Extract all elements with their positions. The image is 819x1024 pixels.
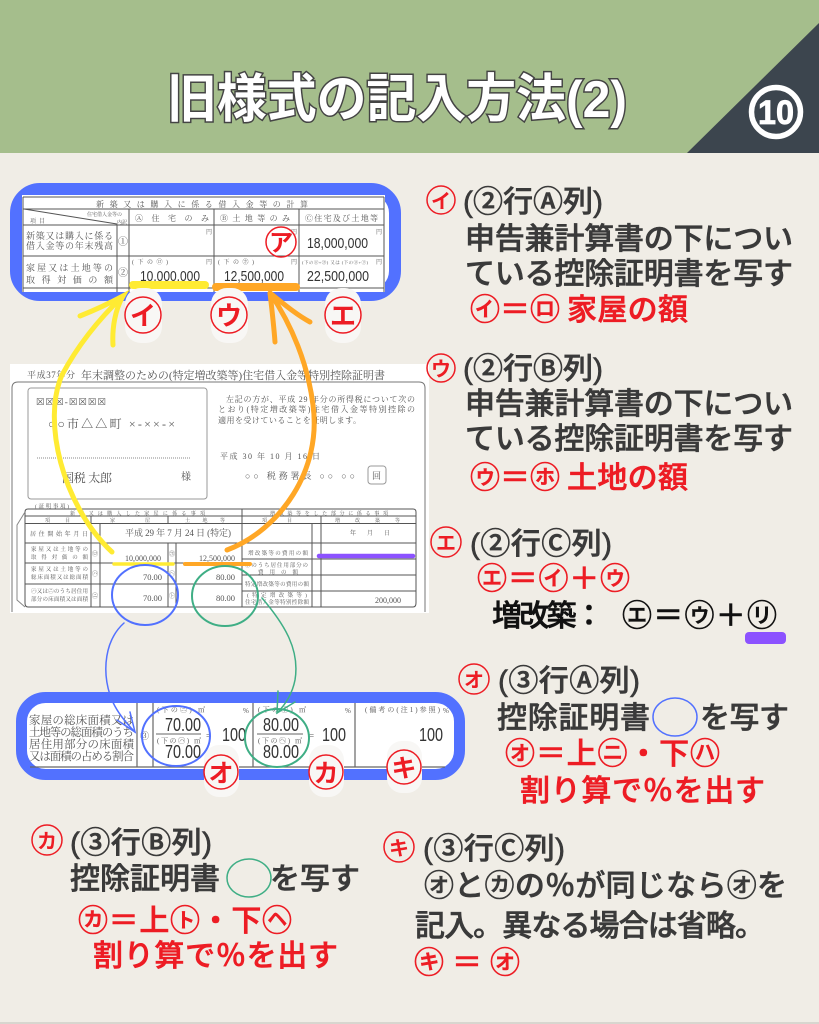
badge: ウ: [211, 288, 248, 343]
text block: オ explanation: 割り算で％を出す: [520, 775, 765, 808]
text block: キ explanation: ㋖ ＝ ㋔: [414, 947, 520, 980]
text block: キ explanation: [384, 832, 787, 980]
panel: loan calculation table: 円: [291, 229, 297, 236]
text block: イ explanation: ている控除証明書を写す: [465, 258, 793, 291]
panel: floor area ratio table: 70.00: [165, 742, 201, 762]
text block: カ explanation: [32, 825, 360, 973]
panel: floor area ratio table: 家屋の総床面積又は: [29, 713, 134, 727]
panel: floor area ratio table: 100: [222, 725, 246, 745]
panel: loan calculation table: 10,000,000: [140, 268, 200, 285]
panel: floor area ratio table: =: [309, 731, 314, 741]
panel: deduction certificate: 費用の額: [258, 568, 298, 576]
panel: loan calculation table: 円: [376, 259, 382, 266]
panel: floor area ratio table: %: [345, 707, 351, 715]
page number badge: [752, 88, 800, 136]
text block: ウ explanation: (②行Ⓑ列): [463, 353, 603, 386]
panel: deduction certificate: 平成 29 年 7 月 24 日 (特定): [125, 527, 231, 538]
panel: deduction certificate: 居住開始年月日: [30, 530, 88, 538]
text block: オ explanation: (③行Ⓐ列): [498, 665, 640, 698]
panel: deduction certificate: 年 月 日: [350, 529, 390, 537]
text block: キ explanation: ㋔と㋕の％が同じなら㋔を: [424, 870, 787, 903]
panel: loan calculation table: 22,500,000: [307, 268, 369, 285]
highlight: purple renovation cost: [319, 554, 413, 558]
panel: deduction certificate: 平成37年分: [27, 369, 75, 380]
panel: deduction certificate: 増改築等の費用の額: [248, 549, 308, 557]
panel: deduction certificate: ㋺: [92, 550, 98, 558]
text block: ウ explanation: [427, 353, 793, 495]
panel: loan calculation table: 住宅借入金等の: [87, 211, 122, 218]
panel: floor area ratio table: 100: [322, 725, 346, 745]
panel: deduction certificate: 200,000: [375, 596, 401, 605]
panel: loan calculation table: [16, 189, 395, 295]
title: 旧様式の記入方法(2): [167, 71, 627, 129]
badge: ア: ア: [269, 230, 293, 257]
badge: オ: [204, 745, 239, 797]
text block: エ explanation: (②行Ⓒ列): [470, 528, 612, 561]
badge: カ: [309, 745, 344, 797]
text block: エ explanation: [431, 527, 786, 644]
text block: オ explanation: ㋔＝上㋥・下㋩: [505, 738, 720, 771]
panel: deduction certificate: 家屋又は土地等の: [31, 565, 88, 573]
text block: カ explanation: カ: [37, 831, 57, 853]
panel: deduction certificate: 家屋: [110, 517, 150, 524]
text block: イ explanation: イ: [431, 191, 451, 213]
panel: deduction certificate: 住宅借入金等特別控除額: [245, 598, 309, 606]
panel: loan calculation table: Ⓐ住宅のみ: [135, 213, 209, 223]
text block: ウ explanation: ㋒＝㋭: [470, 462, 560, 495]
text block: オ explanation: オ: [464, 670, 484, 692]
text block: キ explanation: (③行Ⓒ列): [423, 833, 565, 866]
panel: deduction certificate: 適用を受けていることを証明します。: [218, 415, 361, 425]
panel: loan calculation table: ②: [118, 267, 128, 279]
panel: deduction certificate: ㋷のうち居住用部分の: [245, 561, 308, 569]
panel: deduction certificate: ㋣: [169, 592, 175, 600]
panel: deduction certificate: 項目: [45, 517, 70, 524]
panel: loan calculation table: (下の㋺+㋭) 又は (下の㋺+㋷): [302, 259, 368, 266]
badge: オ: オ: [208, 760, 234, 788]
arrow: yellow to column A: [54, 296, 123, 552]
panel: loan calculation table: 借入金等の年末残高: [26, 240, 113, 251]
text block: イ explanation: [427, 186, 793, 327]
text block: イ explanation: 申告兼計算書の下につい: [465, 223, 793, 256]
badge: カ: カ: [313, 760, 339, 788]
panel: deduction certificate: (証明事項): [35, 502, 69, 510]
text block: オ explanation: 控除証明書: [497, 702, 650, 735]
panel: floor area ratio table: %: [443, 707, 449, 715]
panel: deduction certificate: 特定増改築等の費用の額: [245, 580, 309, 588]
text block: エ explanation: ㋓＝㋒＋㋷: [622, 600, 777, 633]
panel: loan calculation table: Ⓒ住宅及び土地等: [305, 213, 378, 223]
panel: deduction certificate: (特定増改築等): [247, 591, 307, 599]
text block: キ explanation: 記入。異なる場合は省略。: [415, 910, 765, 943]
text block: エ explanation: エ: [436, 533, 456, 555]
panel: floor area ratio table: 80.00: [263, 715, 299, 735]
panel: floor area ratio table: %: [243, 707, 249, 715]
text block: ウ explanation: 申告兼計算書の下につい: [465, 388, 793, 421]
panel: deduction certificate: ☒☒☒-☒☒☒☒: [36, 397, 106, 408]
panel: deduction certificate: ㋭: [169, 550, 175, 558]
panel: loan calculation table: 項目: [30, 217, 45, 225]
panel: loan calculation table: 円: [376, 229, 382, 236]
panel: loan calculation table: Ⓑ土地等のみ: [220, 213, 290, 223]
panel: deduction certificate: 回: [372, 471, 381, 481]
panel: floor area ratio table: (下の㋣) ㎡: [258, 705, 306, 714]
text block: イ explanation: 家屋の額: [567, 294, 688, 327]
panel: loan calculation table: 新築又は購入に係る: [26, 230, 113, 241]
panel: floor area ratio table: 80.00: [263, 742, 299, 762]
panel: loan calculation table: 12,500,000: [224, 268, 284, 285]
panel: loan calculation table: (下の㋺): [132, 258, 168, 266]
panel: deduction certificate: とおり(特定増改築等)住宅借入金等特別控除の: [218, 404, 415, 414]
text block: カ explanation: ㋕＝上㋣・下㋬: [78, 905, 292, 938]
text block: オ explanation: [459, 664, 789, 808]
badge: エ: エ: [330, 301, 356, 331]
panel: floor area ratio table: 70.00: [165, 715, 201, 735]
panel: deduction certificate: 12,500,000: [199, 554, 235, 563]
panel: loan calculation table: 円: [206, 229, 212, 236]
panel: loan calculation table: 家屋又は土地等の: [26, 262, 113, 273]
panel: loan calculation table: 内訳: [117, 219, 127, 226]
panel: deduction certificate: 増改築等をした部分に係る事項: [270, 510, 388, 517]
text block: ウ explanation: ウ: [431, 358, 451, 381]
panel: loan calculation table: 取得対価の額: [26, 274, 114, 285]
panel: floor area ratio table: (備考の(注1)参照): [365, 705, 441, 714]
badge: イ: イ: [130, 301, 156, 331]
panel: deduction certificate: 平成 30 年 10 月 16 日: [220, 451, 320, 461]
panel: loan calculation table: 円: [291, 259, 297, 266]
text block: カ explanation: 割り算で％を出す: [93, 940, 338, 973]
panel: deduction certificate: ㋩又は㋥のうち居住用: [31, 587, 88, 595]
panel: deduction certificate: 総床面積又は総面積: [31, 573, 88, 581]
badge: キ: キ: [391, 755, 417, 783]
panel: loan calculation table: ①: [118, 236, 128, 248]
panel: loan calculation table: 新築又は購入に係る借入金等の計算: [96, 199, 308, 209]
panel: deduction certificate: 80.00: [216, 572, 235, 582]
text block: エ explanation: 増改築：: [492, 600, 604, 633]
text block: キ explanation: キ: [389, 838, 409, 860]
panel: deduction certificate: 土地等: [185, 517, 225, 524]
panel: floor area ratio table: =: [206, 731, 211, 741]
panel: floor area ratio table: 100: [419, 725, 443, 745]
panel: loan calculation table: 円: [206, 259, 212, 266]
panel: floor area ratio table: (下の㋥) ㎡: [157, 705, 205, 714]
text block: カ explanation: (③行Ⓑ列): [70, 827, 212, 860]
panel: deduction certificate: ○○市△△町 ×-××-×: [48, 416, 175, 431]
panel: deduction certificate: 増改築等: [335, 517, 400, 524]
badge: エ: [325, 288, 361, 343]
ellipse: green area mark: [192, 566, 258, 626]
panel: deduction certificate: 70.00: [143, 593, 162, 603]
page number badge: 10: [758, 94, 794, 132]
badge: キ: [387, 741, 422, 793]
text block: カ explanation: 控除証明書: [70, 863, 220, 896]
panel: floor area ratio table: 土地等の総面積のうち: [29, 725, 134, 739]
arrow: green to table: [262, 598, 296, 713]
panel: deduction certificate: 部分の床面積又は面積: [31, 595, 88, 603]
highlight: orange under land amount: [185, 562, 250, 566]
badge: ウ: ウ: [216, 301, 242, 331]
panel: deduction certificate: 左記の方が、平成 29 年分の所得税について次の: [226, 394, 415, 404]
text block: イ explanation: (②行Ⓐ列): [463, 186, 603, 219]
text block: エ explanation: ㋓＝㋑＋㋒: [477, 563, 630, 596]
panel: floor area ratio table: 又は面積の占める割合: [29, 749, 134, 763]
panel: deduction certificate: [10, 364, 429, 613]
header banner: [0, 0, 819, 153]
panel: deduction certificate: 新築又は購入した家屋に係る事項: [70, 510, 205, 517]
panel: deduction certificate: ㋬: [169, 570, 175, 578]
panel: loan calculation table: (下の㋭): [218, 258, 254, 266]
panel: floor area ratio table: [22, 698, 460, 774]
text block: オ explanation: を写す: [700, 702, 789, 735]
panel: deduction certificate: 項目: [262, 517, 292, 524]
panel: deduction certificate: ㋥: [92, 592, 98, 600]
panel: floor area ratio table: (下の㋩) ㎡: [157, 736, 201, 745]
text block: カ explanation: を写す: [270, 863, 360, 896]
arrow: orange to column B: [227, 293, 314, 550]
panel: deduction certificate: 80.00: [216, 593, 235, 603]
panel: deduction certificate: 10,000,000: [125, 554, 161, 563]
panel: loan calculation table: 18,000,000: [307, 235, 368, 252]
text block: ウ explanation: 土地の額: [567, 462, 688, 495]
text block: ウ explanation: ている控除証明書を写す: [465, 423, 793, 456]
panel: floor area ratio table: ③: [140, 731, 149, 741]
panel: deduction certificate: 年末調整のための(特定増改築等)住宅借入金等特別控除証明書: [81, 368, 385, 382]
panel: deduction certificate: 家屋又は土地等の: [31, 545, 88, 553]
text block: イ explanation: ㋑＝㋺: [470, 294, 560, 327]
panel: deduction certificate: ○○ 税務署長 ○○ ○○: [245, 471, 355, 481]
panel: deduction certificate: ㋩: [92, 570, 98, 578]
panel: deduction certificate: 国税 太郎: [62, 470, 112, 485]
panel: floor area ratio table: 居住用部分の床面積: [29, 737, 136, 751]
arrow: blue to table: [106, 623, 135, 732]
panel: floor area ratio table: (下の㋬) ㎡: [258, 736, 302, 745]
highlight: yellow under house amount: [114, 562, 173, 566]
panel: deduction certificate: 様: [181, 470, 191, 483]
ellipse: blue area mark: [112, 565, 178, 625]
panel: deduction certificate: 70.00: [143, 572, 162, 582]
badge: イ: [125, 288, 162, 343]
panel: deduction certificate: 取得対価の額: [31, 553, 88, 561]
